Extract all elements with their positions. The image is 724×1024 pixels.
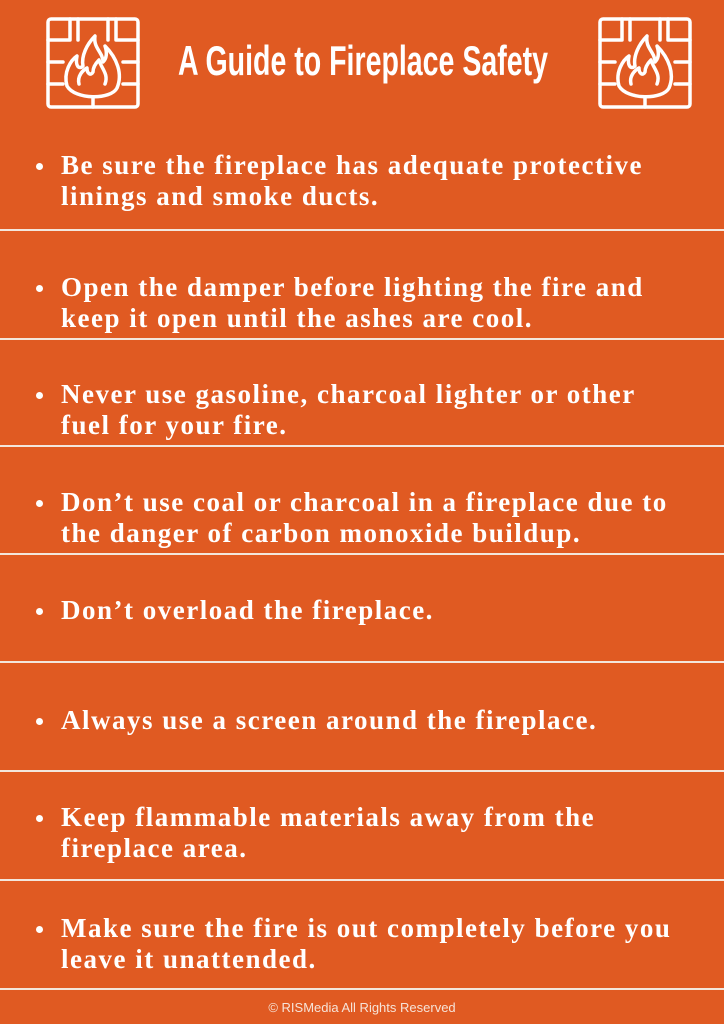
item 2 (36, 272, 644, 333)
item 1: Be sure the fireplace has adequate protective (61, 150, 643, 180)
item 8 (36, 913, 671, 974)
item 1: linings and smoke ducts. (61, 181, 379, 211)
item 6: Always use a screen around the fireplace. (61, 705, 597, 735)
item 4 (36, 487, 668, 548)
item 7 (36, 802, 595, 863)
item 1 (36, 150, 643, 211)
item 2: keep it open until the ashes are cool. (61, 303, 533, 333)
footer: © RISMedia All Rights Reserved (268, 1000, 456, 1015)
item 4: the danger of carbon monoxide buildup. (61, 518, 581, 548)
item 8: Make sure the fire is out completely before you (61, 913, 671, 943)
item 5: Don’t overload the fireplace. (61, 595, 434, 625)
item 4: Don’t use coal or charcoal in a fireplace due to (61, 487, 668, 517)
item 2: Open the damper before lighting the fire and (61, 272, 644, 302)
item 7: fireplace area. (61, 833, 247, 863)
item 3: Never use gasoline, charcoal lighter or other (61, 379, 636, 409)
item 3: fuel for your fire. (61, 410, 287, 440)
icon: fireplace right (598, 17, 692, 109)
item 3 (36, 379, 636, 440)
icon: fireplace left (46, 17, 140, 109)
item 7: Keep flammable materials away from the (61, 802, 595, 832)
item 8: leave it unattended. (61, 944, 317, 974)
